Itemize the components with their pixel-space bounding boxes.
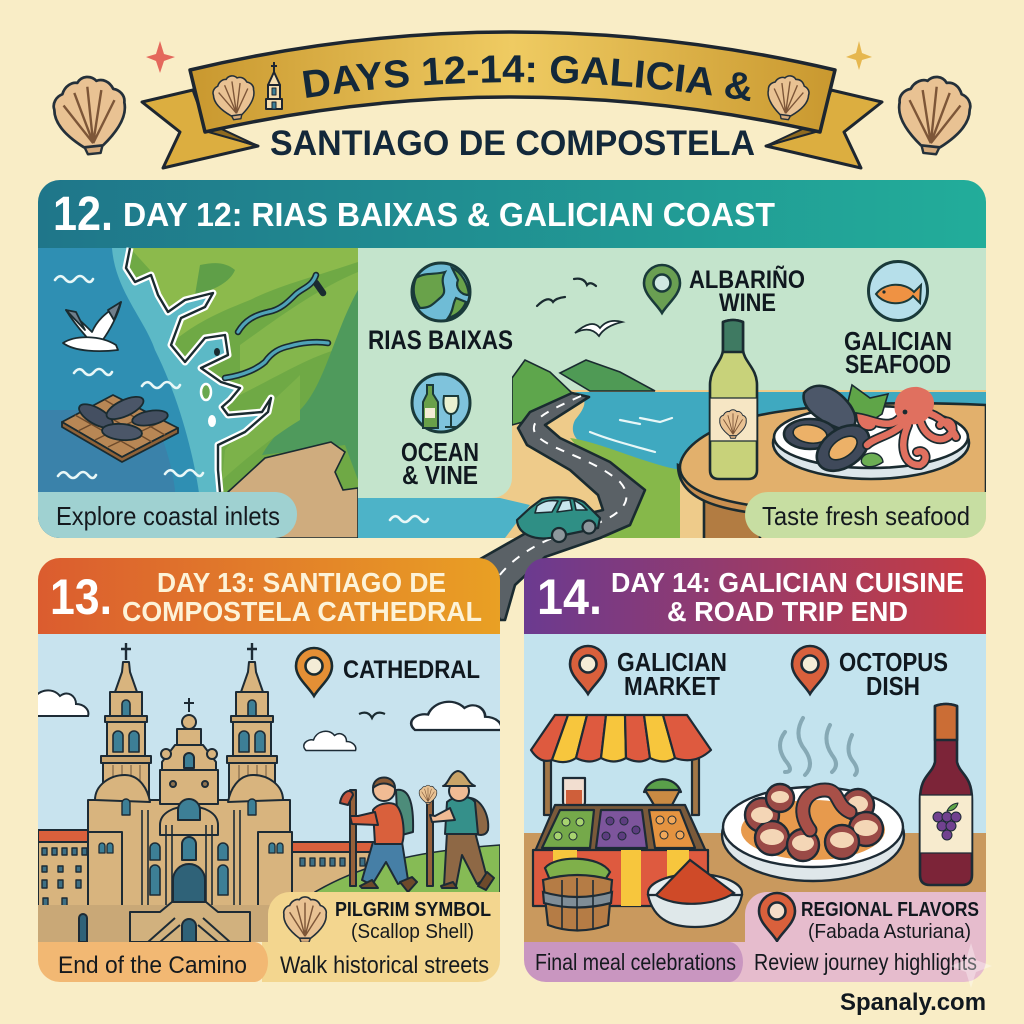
sky: [38, 634, 500, 857]
icon: seagull: [63, 302, 121, 351]
map pin: octopus: [792, 646, 828, 694]
pill: end of the camino: [38, 942, 268, 982]
map pin: market: [570, 646, 606, 694]
awning: [531, 715, 711, 762]
number 12: 12.: [53, 188, 113, 241]
header: day 14: [524, 558, 986, 634]
label: galician seafood: GALICIAN: [844, 326, 952, 356]
bird: [359, 713, 385, 718]
fabada sublabel: (Fabada Asturiana): [808, 921, 971, 943]
icon: fish: [868, 262, 928, 320]
bowl of paprika: [648, 860, 742, 927]
wine bottle: [710, 320, 757, 479]
scallop shell: left: [51, 73, 130, 157]
ribbon main: [190, 32, 835, 132]
callout: pilgrim symbol: [268, 892, 500, 943]
heading day 12: DAY 12: RIAS BAIXAS & GALICIAN COAST: [123, 196, 775, 233]
pilgrim 2: [419, 771, 494, 890]
waves on sea: [390, 516, 428, 522]
coastal scene: [358, 248, 986, 540]
map pin: regional: [759, 893, 795, 941]
right building: [290, 842, 380, 912]
map pin: cathedral: [296, 648, 332, 696]
octopus: [861, 412, 956, 465]
label: rias baixas: RIAS BAIXAS: [368, 325, 513, 355]
title line 2: SANTIAGO DE COMPOSTELA: [270, 124, 755, 163]
panel: day 14: [524, 558, 986, 982]
ribbon tail: left: [142, 90, 258, 168]
map of coast: [38, 248, 360, 540]
label: octopus dish: OCTOPUS: [839, 647, 948, 677]
octopus dish: [722, 784, 904, 881]
regional flavors label: REGIONAL FLAVORS: [801, 899, 979, 921]
barrel of greens: [543, 859, 612, 930]
clouds: [19, 690, 501, 750]
sky and table: [524, 634, 986, 833]
pill: final meal celebrations: Final meal celebrations: [535, 949, 736, 975]
birds: [537, 279, 622, 336]
coastline dark: [126, 248, 271, 492]
ribbon fold: left: [205, 125, 258, 146]
basket of greens: [644, 779, 681, 792]
label: cathedral: CATHEDRAL: [343, 656, 480, 684]
panel: day 12: [38, 180, 986, 540]
ribbon tail: right: [766, 90, 882, 168]
islands: [201, 348, 220, 427]
brand: spanaly.com: Spanaly.com: [840, 989, 986, 1016]
heading day 14: DAY 14: GALICIAN CUISINE: [611, 567, 964, 598]
pilgrim 1: [340, 778, 417, 892]
seafood plate: [773, 385, 969, 480]
plaza and stairs: [38, 905, 300, 942]
pill: review journey highlights: Review journey highlights: [754, 949, 977, 975]
pill: explore coastal inlets: [38, 492, 297, 538]
pilgrims: [340, 771, 494, 892]
counter: [533, 850, 708, 906]
ribbon fold: right: [766, 125, 819, 146]
pill: walk historical streets: Walk historical streets: [280, 952, 489, 979]
icon: globe: [412, 263, 470, 321]
sparkle: red: [146, 41, 175, 73]
label: albarino wine: WINE: [719, 289, 776, 317]
banner shell right: [765, 73, 811, 122]
heading day 13: COMPOSTELA CATHEDRAL: [122, 596, 482, 627]
title banner: [52, 30, 972, 170]
pill: explore coastal inlets: Explore coastal inlets: [56, 501, 280, 531]
river inlets: [225, 275, 328, 378]
land masses: [130, 248, 358, 492]
icon: scallop shell: [284, 897, 326, 942]
label: octopus dish: DISH: [866, 671, 920, 701]
left building: [38, 830, 90, 942]
heading day 13: DAY 13: SANTIAGO DE: [157, 567, 446, 598]
header: day 12: [38, 180, 986, 248]
title banner: DAYS 12-14: GALICIA &: [302, 55, 750, 101]
number 14: 14.: [537, 569, 602, 625]
pill: taste fresh seafood: Taste fresh seafood: [762, 501, 970, 531]
mussels: [804, 386, 855, 430]
winding road: [475, 393, 645, 620]
left tower: [101, 643, 151, 833]
label: galician seafood: SEAFOOD: [845, 349, 951, 379]
label: albarino wine: ALBARIÑO: [689, 264, 805, 294]
heading day 14: & ROAD TRIP END: [667, 596, 908, 627]
pilgrim symbol label: PILGRIM SYMBOL: [335, 899, 491, 921]
banner church icon: [266, 62, 282, 109]
icon: mussel raft: [62, 392, 178, 462]
central facade: [88, 698, 290, 910]
icon: ocean and vine: [412, 374, 470, 432]
right tower: [227, 643, 277, 833]
map pin: albarino: [644, 265, 680, 313]
scallop shell sublabel: (Scallop Shell): [351, 921, 474, 943]
sparkle: gold: [846, 41, 872, 70]
steam: [780, 718, 857, 775]
pill: final meal celebrations: [524, 942, 743, 982]
icon: car: [517, 497, 600, 542]
produce crates: [533, 805, 708, 856]
header: day 13: [38, 558, 500, 634]
label: galician market: MARKET: [624, 671, 720, 701]
label: galician market: GALICIAN: [617, 647, 727, 677]
water waves: [55, 276, 203, 478]
tan land: [228, 442, 358, 538]
red wine bottle: [920, 704, 972, 885]
pill: walk historical streets: [262, 942, 500, 982]
cathedral illustration: [38, 643, 380, 942]
watermark sparkle: [950, 943, 992, 988]
side pavilions: [88, 832, 122, 910]
label: ocean and vine: & VINE: [402, 460, 478, 490]
title line 1: [300, 82, 755, 102]
panel: day 13: [19, 558, 501, 982]
coastal hills: [560, 360, 655, 391]
table: [678, 403, 986, 540]
jar: [563, 778, 585, 806]
pill: review journey highlights: [730, 942, 986, 982]
pill: taste fresh seafood: [745, 492, 986, 538]
callout: regional flavors: [745, 892, 986, 943]
river water: [225, 275, 328, 378]
pill: end of the camino: End of the Camino: [58, 952, 247, 979]
cathedral door: [173, 864, 205, 905]
label: ocean and vine: OCEAN: [401, 437, 479, 467]
market stall: [531, 715, 711, 906]
left label block: [358, 376, 512, 498]
banner shell left: [211, 73, 257, 122]
number 13: 13.: [50, 569, 112, 625]
green hill: [315, 845, 500, 895]
scallop shell: right: [894, 73, 973, 157]
coastline: [126, 248, 271, 492]
